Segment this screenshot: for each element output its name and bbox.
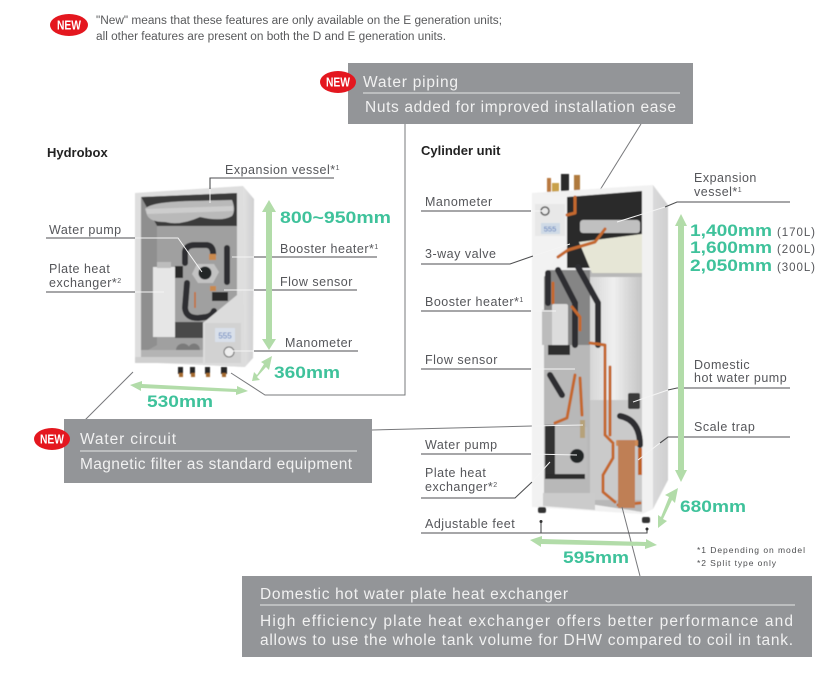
callout: water piping [320,63,693,124]
label: plate heat exchanger: 2 [493,482,498,489]
label: domestic hot water pump: hot water pump [694,371,787,385]
callout: water piping: Nuts added for improved installation ease [365,99,676,116]
front control panel [203,291,245,367]
label: manometer: Manometer [425,195,493,209]
label: expansion vessel: Expansion [694,171,757,185]
label: plate heat exchanger: Plate heat [49,262,110,276]
legend: new badge explanation: all other features are present on both the D and E generation units. [96,31,446,43]
label: expansion vessel: 1 [738,187,742,194]
label: domestic hot water pump: Domestic [694,358,750,372]
label: plate heat exchanger: 2 [117,278,122,285]
label: plate heat exchanger: Plate heat [425,466,486,480]
side panel [243,186,254,367]
callout: water circuit [34,419,372,483]
dimension: heights: (300L) [777,262,815,274]
pipes [185,245,213,263]
arrow: height [675,214,687,482]
dimension: depth: 680mm [680,497,746,516]
label: booster heater: Booster heater* [280,242,374,256]
label: adjustable feet: Adjustable feet [425,517,515,531]
legend: new badge explanation [50,14,502,43]
label: flow sensor [224,275,357,290]
dimension: width: 530mm [147,392,213,411]
illustration: cylinder unit: 555 [544,224,556,234]
label: manometer [232,336,358,351]
callout: water piping: NEW [326,74,351,90]
dimension: heights: (200L) [777,244,815,256]
leader lines from callouts [85,124,641,576]
label: flow sensor: Flow sensor [280,275,353,289]
copper pipes [558,229,605,257]
label: 3-way valve: 3-way valve [425,247,496,261]
dimension: height: 800~950mm [280,208,391,227]
tank [590,277,642,500]
label: manometer: Manometer [285,336,353,350]
cabinet front frame [532,185,653,514]
heading: Cylinder unit: Cylinder unit [421,143,501,158]
label: expansion vessel: Expansion vessel* [225,163,336,177]
expansion vessel [580,220,640,233]
footnotes [697,545,805,568]
label: plate heat exchanger [46,262,164,292]
front panel [532,193,567,506]
callout: domestic hot water plate heat exchanger: High efficiency plate heat exchanger offers better performance and [260,613,793,630]
label: expansion vessel [210,163,340,203]
dimension: heights: 1,400mm [690,221,772,240]
interior back [544,270,642,512]
dimension: heights: (170L) [777,227,815,239]
plate heat exchanger [153,267,175,337]
dimension: depth: 360mm [274,363,340,382]
legend: new badge explanation: NEW [57,18,82,32]
hydrobox labels [46,163,379,351]
dimension: heights: 2,050mm [690,256,772,275]
insulated pipes [545,273,551,303]
heading: Hydrobox: Hydrobox [47,145,108,160]
label: booster heater: Booster heater* [425,295,519,309]
cylinder unit labels [421,171,790,533]
dimension: heights: 1,600mm [690,238,772,257]
arrow: height [262,200,276,350]
label: adjustable feet [421,517,648,533]
label: expansion vessel: vessel* [694,185,738,199]
tank top insulation [579,234,642,273]
domestic hot water pump [628,393,640,409]
cylinder leader overlays [532,425,628,530]
label: domestic hot water pump [633,358,790,402]
booster heater [542,310,558,345]
callout: water piping: Water piping [363,74,458,91]
label: expansion vessel: 1 [336,165,340,172]
label: plate heat exchanger: exchanger* [49,276,117,290]
label: scale trap [638,420,790,460]
label: manometer [421,195,543,211]
bottom tray [543,493,595,510]
lower fittings [175,322,203,338]
water pump [192,264,219,283]
callout: water circuit: Magnetic filter as standard equipment [80,456,353,473]
label: expansion vessel [617,171,790,222]
label: water pump: Water pump [425,438,498,452]
footnotes: *2 Split type only [697,558,777,568]
hydrobox dimensions [130,200,391,411]
label: water pump: Water pump [49,223,122,237]
arrow: depth [658,488,678,528]
label: flow sensor: Flow sensor [425,353,498,367]
arrow: width [130,381,248,395]
pump housing [555,427,587,478]
illustration: hydrobox unit: 555 [218,332,232,340]
dimension: heights [690,221,815,275]
label: 3-way valve [421,244,570,264]
label: booster heater: 1 [374,244,379,251]
label: booster heater [421,295,556,311]
illustration: cylinder unit [532,174,668,523]
dimension: width: 595mm [563,548,629,567]
callout: domestic hot water plate heat exchanger [242,576,812,657]
top fittings [547,174,580,192]
legend: new badge explanation: "New" means that these features are only available on the E generation units; [96,15,502,27]
pipe stubs [178,367,227,374]
cabinet front [135,186,245,367]
callout: domestic hot water plate heat exchanger: allows to use the whole tank volume for DHW compared to coil in tank. [260,632,793,649]
arrow: width [530,536,657,549]
label: booster heater: 1 [519,297,524,304]
plate heat exchanger copper [616,440,638,446]
label: water pump [46,223,202,272]
arrow: depth [252,356,272,381]
expansion vessel [145,200,234,223]
interior dark upper [567,191,642,268]
callout: water circuit: NEW [40,432,65,446]
illustration: hydrobox unit [135,186,254,377]
feet [538,507,546,513]
callout: domestic hot water plate heat exchanger: Domestic hot water plate heat exchanger [260,586,568,603]
cylinder unit dimensions [530,214,815,567]
footnotes: *1 Depending on model [697,545,805,555]
callout: water circuit: Water circuit [80,431,177,448]
right side panel [642,185,668,513]
label: booster heater [232,242,379,257]
label: scale trap: Scale trap [694,420,755,434]
label: plate heat exchanger: exchanger* [425,480,493,494]
label: plate heat exchanger [421,462,550,498]
interior [141,193,237,355]
